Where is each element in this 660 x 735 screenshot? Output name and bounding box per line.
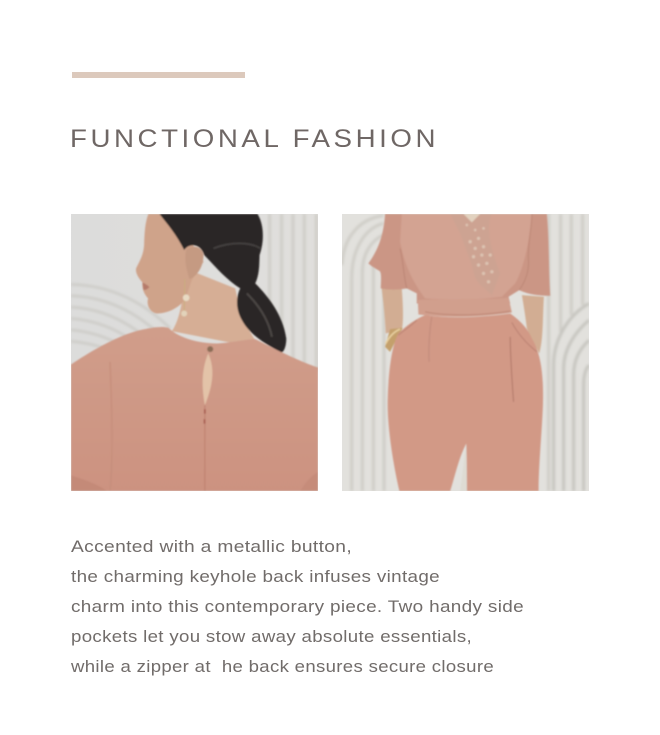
right arcs	[554, 303, 589, 491]
photo: keyhole back of blouse	[71, 214, 318, 491]
left arcs	[352, 223, 383, 278]
striped wall	[342, 214, 589, 491]
neck and skin	[172, 272, 260, 348]
waistband	[418, 298, 512, 317]
arms	[382, 288, 403, 333]
body copy	[70, 537, 524, 676]
earring	[183, 279, 186, 315]
blouse	[71, 327, 318, 491]
line 2: the charming keyhole back infuses vintage	[71, 567, 440, 586]
lace panel	[450, 214, 500, 295]
left wall arcs	[71, 284, 170, 349]
line 3: charm into this contemporary piece. Two handy side	[71, 597, 524, 616]
line 5: while a zipper at he back ensures secure closure	[70, 657, 494, 676]
line 4: pockets let you stow away absolute essentials,	[71, 627, 472, 646]
trousers	[388, 313, 543, 491]
bodice and sleeves	[368, 214, 550, 303]
title: FUNCTIONAL FASHION	[70, 125, 439, 153]
ear	[185, 247, 204, 279]
hair	[159, 214, 286, 352]
accent bar	[72, 72, 245, 78]
photo: jumpsuit front	[342, 214, 589, 491]
keyhole	[203, 354, 212, 405]
right wall stripes	[71, 214, 316, 372]
button	[207, 346, 213, 352]
line 1: Accented with a metallic button,	[71, 537, 352, 556]
